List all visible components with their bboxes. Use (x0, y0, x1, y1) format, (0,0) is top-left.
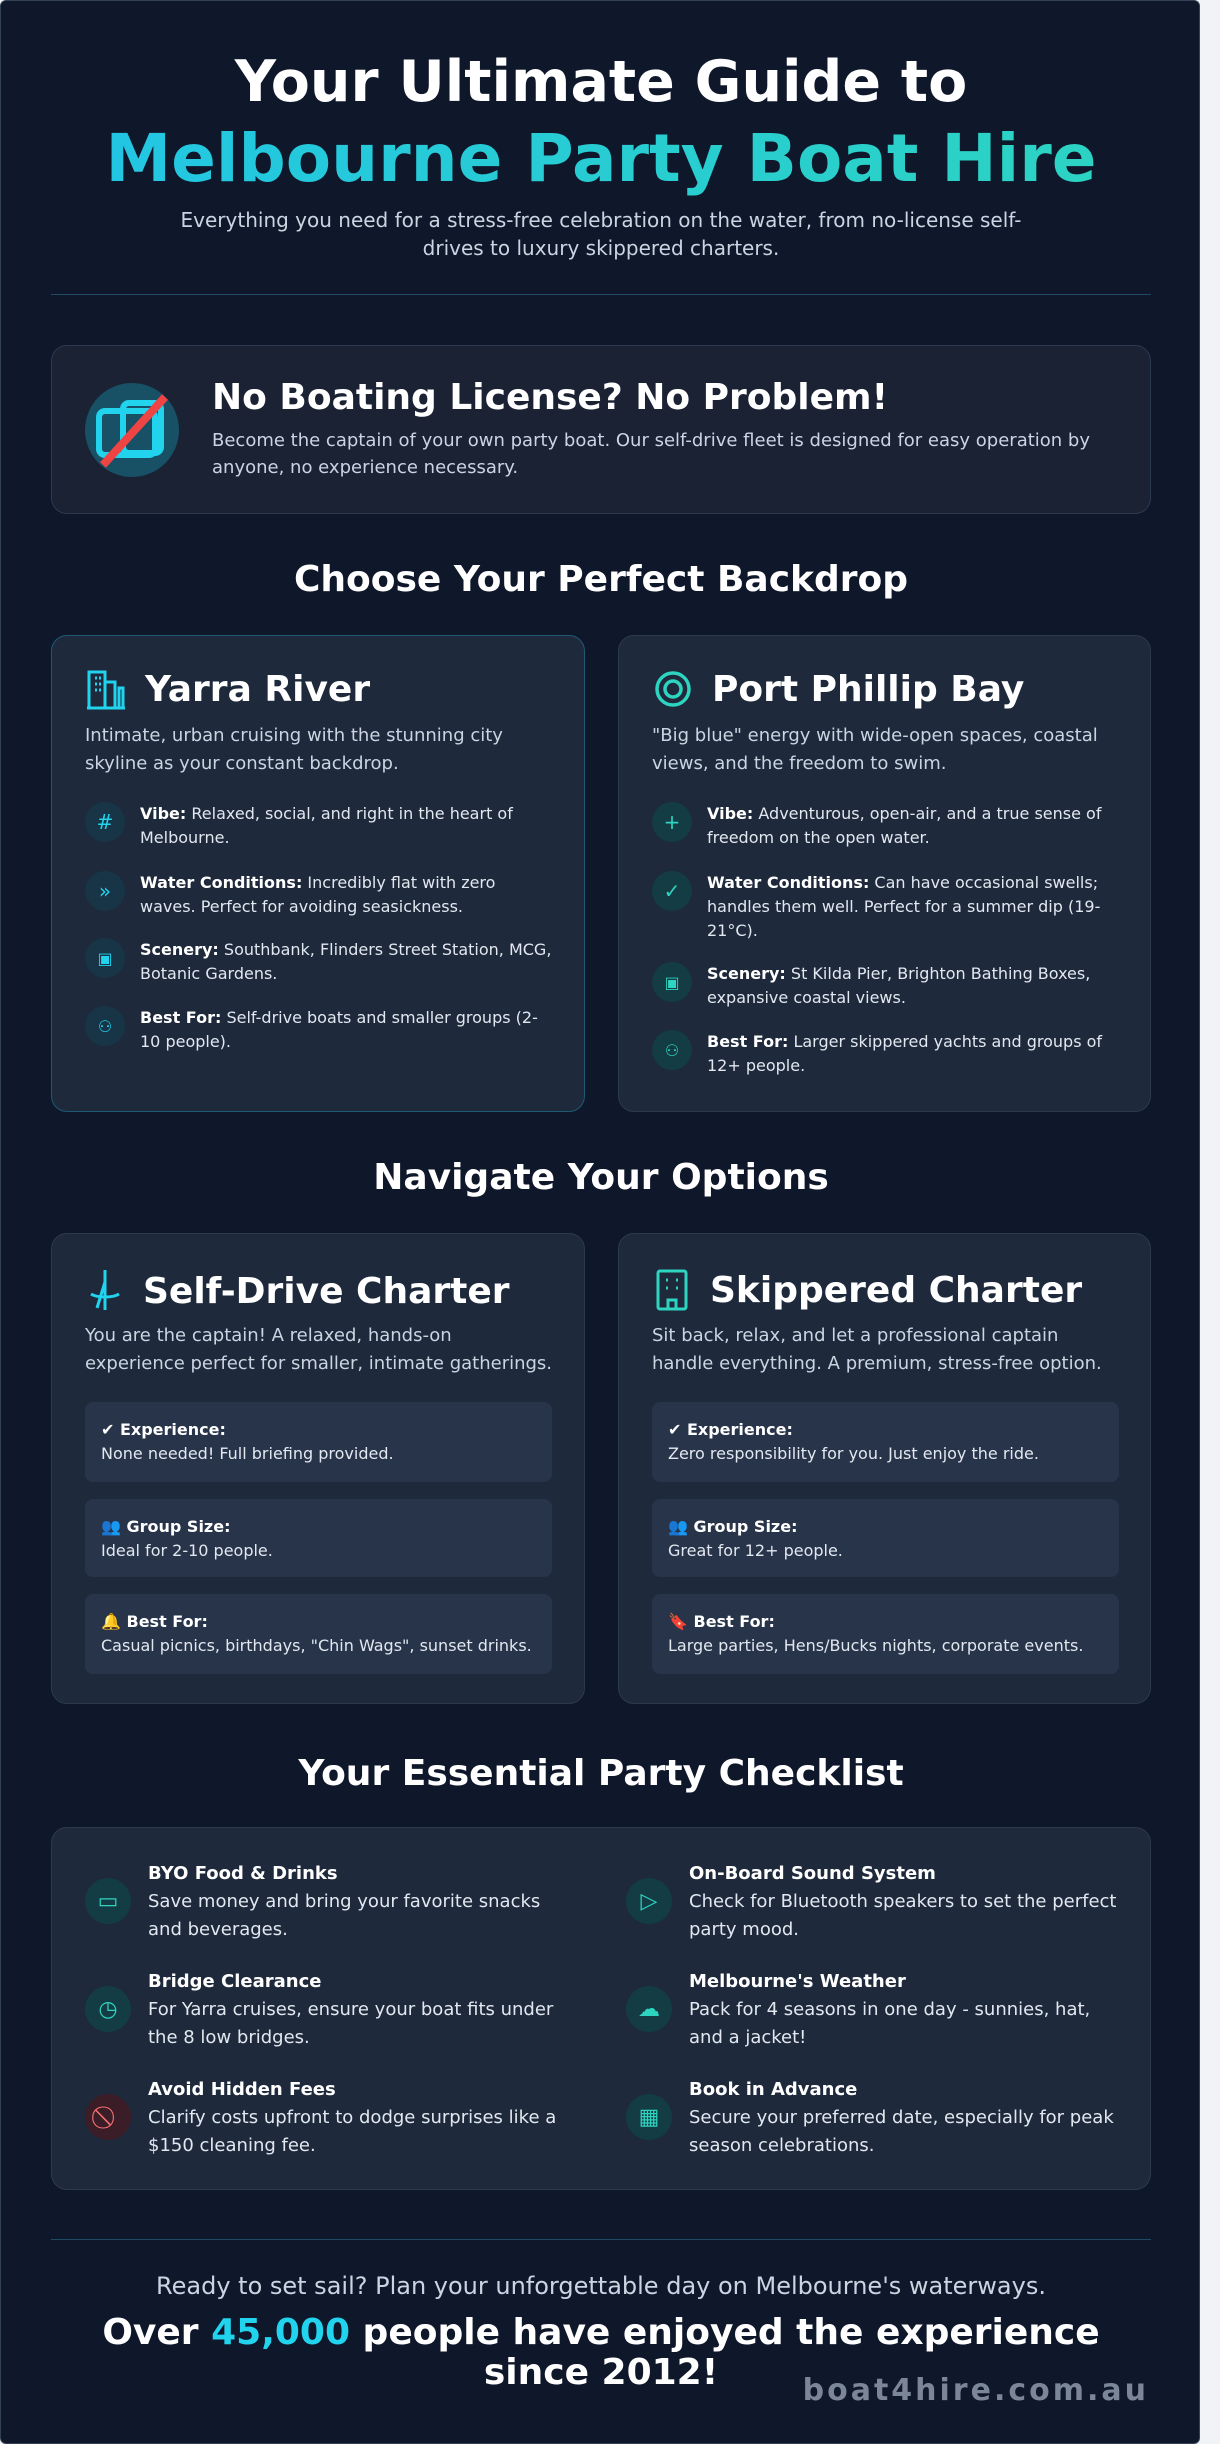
panel: checklist: Pack for 4 seasons in one day - sunnies, hat, (689, 1999, 1090, 2020)
panel: yarra river: Scenery: Southbank, Flinders Street Station, MCG, Botanic Gardens. (140, 940, 551, 983)
panel: checklist: Bridge Clearance (148, 1971, 321, 1992)
panel: yarra river: » (99, 879, 111, 903)
heading: checklist: Your Essential Party Checklist (298, 1753, 904, 1794)
title: Melbourne Party Boat Hire (105, 120, 1097, 197)
panel: skippered: Skippered Charter (710, 1270, 1082, 1310)
panel: checklist: On-Board Sound System (689, 1863, 936, 1884)
panel: yarra river: Best For: Self-drive boats and smaller groups (2-10 people). (140, 1008, 538, 1051)
panel: checklist: ▭ (98, 1888, 118, 1914)
card heading: Yarra River (145, 668, 370, 710)
title (105, 49, 1097, 197)
panel: skippered: Large parties, Hens/Bucks nights, corporate events. (668, 1636, 1083, 1655)
panel: skippered (618, 1233, 1151, 1704)
panel: self-drive: ✔ Experience: (101, 1420, 226, 1439)
panel: yarra river: ⚇ (98, 1016, 112, 1036)
panel: checklist: Clarify costs upfront to dodge surprises like a $150 cleaning fee. (148, 2107, 556, 2156)
text: Become the captain of your own party boat. Our self-drive fleet is designed for easy operation by anyone, no experience necessary. (212, 430, 1090, 478)
footer stat: Over 45,000 people have enjoyed the experience since 2012! (102, 2312, 1100, 2393)
panel: yarra river (51, 635, 585, 1112)
panel: checklist: Avoid Hidden Fees (148, 2079, 336, 2100)
panel: checklist: Check for Bluetooth speakers to set the perfect party mood. (689, 1891, 1116, 1940)
panel: yarra river: Intimate, urban cruising with the stunning city skyline as your constant backdrop. (85, 725, 503, 774)
panel: checklist: and a jacket! (689, 2027, 806, 2048)
panel: port phillip bay: Best For: Larger skippered yachts and groups of 12+ people. (707, 1032, 1102, 1075)
panel: port phillip bay: ✓ (664, 879, 680, 903)
panel: port phillip bay: Water Conditions: Can have occasional swells; handles them well. Perfect for a summer dip (19-21°C). (707, 873, 1100, 940)
panel: checklist: BYO Food & Drinks (148, 1863, 338, 1884)
panel: checklist: Book in Advance (689, 2079, 857, 2100)
panel: port phillip bay: ▣ (664, 972, 680, 992)
brand: boat4hire.com.au (803, 2373, 1149, 2408)
heading: No Boating License? No Problem! (212, 377, 888, 418)
panel: port phillip bay: Port Phillip Bay (712, 668, 1024, 710)
panel: port phillip bay: + (664, 810, 680, 834)
panel: skippered: 👥 Group Size: (668, 1517, 798, 1536)
title: Your Ultimate Guide to (235, 49, 967, 115)
panel: checklist: Save money and bring your favorite snacks and beverages. (148, 1891, 540, 1940)
panel: self-drive: None needed! Full briefing provided. (101, 1444, 394, 1463)
panel: port phillip bay: "Big blue" energy with wide-open spaces, coastal views, and the freedom to swim. (652, 725, 1098, 774)
icon: no license (85, 383, 179, 477)
panel: checklist: ▷ (641, 1888, 657, 1914)
panel: port phillip bay (618, 635, 1151, 1112)
panel: checklist: ▦ (639, 2104, 659, 2130)
panel: yarra river: ▣ (97, 948, 113, 968)
panel: checklist: Melbourne's Weather (689, 1971, 906, 1992)
panel: skippered: Zero responsibility for you. Just enjoy the ride. (668, 1444, 1039, 1463)
heading: backdrop: Choose Your Perfect Backdrop (294, 559, 908, 600)
panel: checklist: ☁ (638, 1996, 660, 2022)
panel: yarra river: Vibe: Relaxed, social, and right in the heart of Melbourne. (140, 804, 513, 847)
footer text: Ready to set sail? Plan your unforgettable day on Melbourne's waterways. (156, 2272, 1046, 2300)
panel: checklist: For Yarra cruises, ensure your boat fits under the 8 low bridges. (148, 1999, 553, 2048)
panel: self-drive: Self-Drive Charter (143, 1270, 510, 1312)
panel: skippered: 🔖 Best For: (668, 1612, 775, 1631)
panel: port phillip bay: Vibe: Adventurous, open-air, and a true sense of freedom on the open water. (707, 804, 1101, 847)
panel: skippered: Great for 12+ people. (668, 1541, 843, 1560)
panel: self-drive: 👥 Group Size: (101, 1517, 230, 1536)
panel: self-drive: Ideal for 2-10 people. (101, 1541, 273, 1560)
panel: checklist (51, 1827, 1151, 2190)
panel: yarra river: # (97, 810, 113, 834)
panel: skippered: Sit back, relax, and let a professional captain handle everything. A premium, stress-free option. (652, 1325, 1102, 1374)
panel: self-drive: 🔔 Best For: (101, 1612, 208, 1631)
panel: self-drive (51, 1233, 585, 1704)
panel: yarra river: Water Conditions: Incredibly flat with zero waves. Perfect for avoiding seasickness. (140, 873, 495, 916)
panel: checklist: Secure your preferred date, especially for peak season celebrations. (689, 2107, 1114, 2156)
panel: self-drive: You are the captain! A relaxed, hands-on experience perfect for smaller, intimate gatherings. (85, 1325, 552, 1374)
panel: port phillip bay: ⚇ (665, 1040, 679, 1060)
panel: checklist: ◷ (98, 1996, 118, 2022)
subtitle: Everything you need for a stress-free celebration on the water, from no-license self-drives to luxury skippered charters. (181, 208, 1021, 260)
panel: self-drive: Casual picnics, birthdays, "Chin Wags", sunset drinks. (101, 1636, 532, 1655)
panel: skippered: ✔ Experience: (668, 1420, 793, 1439)
heading: options: Navigate Your Options (373, 1157, 829, 1198)
panel: no license (51, 345, 1151, 514)
panel: port phillip bay: Scenery: St Kilda Pier, Brighton Bathing Boxes, expansive coastal views. (707, 964, 1090, 1007)
